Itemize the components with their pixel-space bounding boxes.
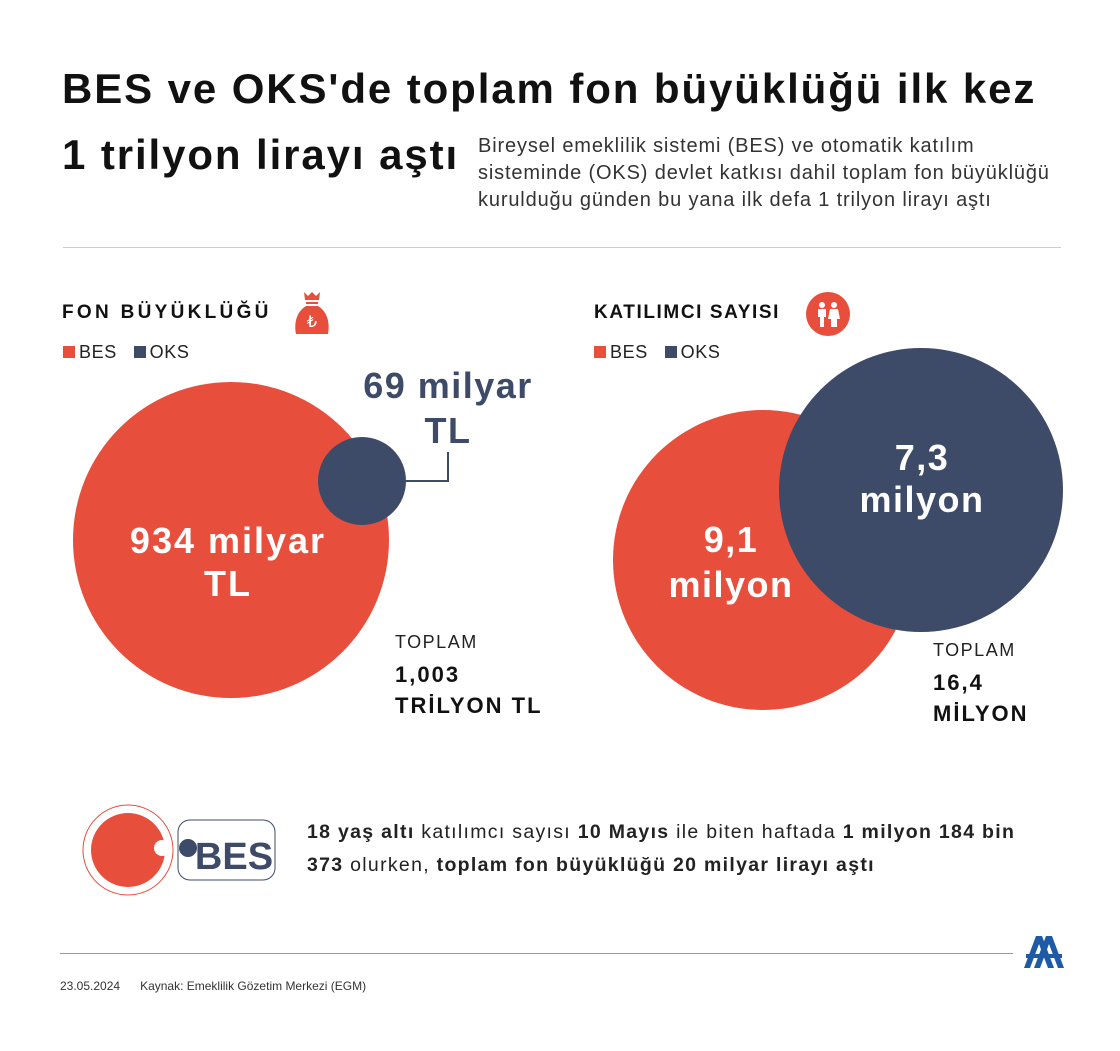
circle OKS [318,365,533,525]
circle BES [73,382,389,698]
logo: BES: BES [195,836,273,878]
logo: BES [82,804,276,896]
circle BES: TL [204,563,252,604]
total right: TOPLAM [933,640,1016,660]
footer: 23.05.2024 Kaynak: Emeklilik Gözetim Merkezi (EGM) [60,979,366,993]
chart: fon bubbles [73,365,533,698]
total right: 16,4 [933,670,984,695]
circle BES: 934 milyar [130,520,326,561]
total right: MİLYON [933,701,1029,726]
chart: katılımcı bubbles: milyon [859,479,985,520]
circle OKS: TL [425,410,471,451]
subtitle [478,135,1050,211]
icon: people [806,292,850,336]
total left: 1,003 [395,662,460,687]
subtitle: sisteminde (OKS) devlet katkısı dahil toplam fon büyüklüğü [478,162,1050,184]
callout text [307,821,1015,876]
legend right: BES OKS [610,342,720,362]
title: BES ve OKS'de toplam fon büyüklüğü ilk kez [62,65,1036,112]
total right [933,640,1029,726]
icon: AA logo [1024,936,1064,968]
chart: katılımcı bubbles [613,348,1063,710]
subtitle: kurulduğu günden bu yana ilk defa 1 trilyon lirayı aştı [478,189,992,211]
chart: katılımcı bubbles: milyon [668,564,794,605]
total left: TOPLAM [395,632,478,652]
title [62,65,1036,178]
circle OKS: 69 milyar [363,365,533,406]
total left [395,632,543,718]
title: 1 trilyon lirayı aştı [62,131,459,178]
chart: katılımcı bubbles: 7,3 [895,437,949,478]
chart: katılımcı bubbles: 9,1 [704,519,758,560]
icon: money bag: ₺ [307,314,317,331]
subtitle: Bireysel emeklilik sistemi (BES) ve otomatik katılım [478,135,975,157]
total left: TRİLYON TL [395,693,543,718]
icon: money bag [295,292,329,334]
callout text: 373 olurken, toplam fon büyüklüğü 20 milyar lirayı aştı [307,854,875,876]
heading: katılımcı: KATILIMCI SAYISI [594,302,780,323]
callout text: 18 yaş altı katılımcı sayısı 10 Mayıs ile biten haftada 1 milyon 184 bin [307,821,1015,843]
heading: fon büyüklüğü: FON BÜYÜKLÜĞÜ [62,302,272,323]
legend left: BES OKS [79,342,189,362]
